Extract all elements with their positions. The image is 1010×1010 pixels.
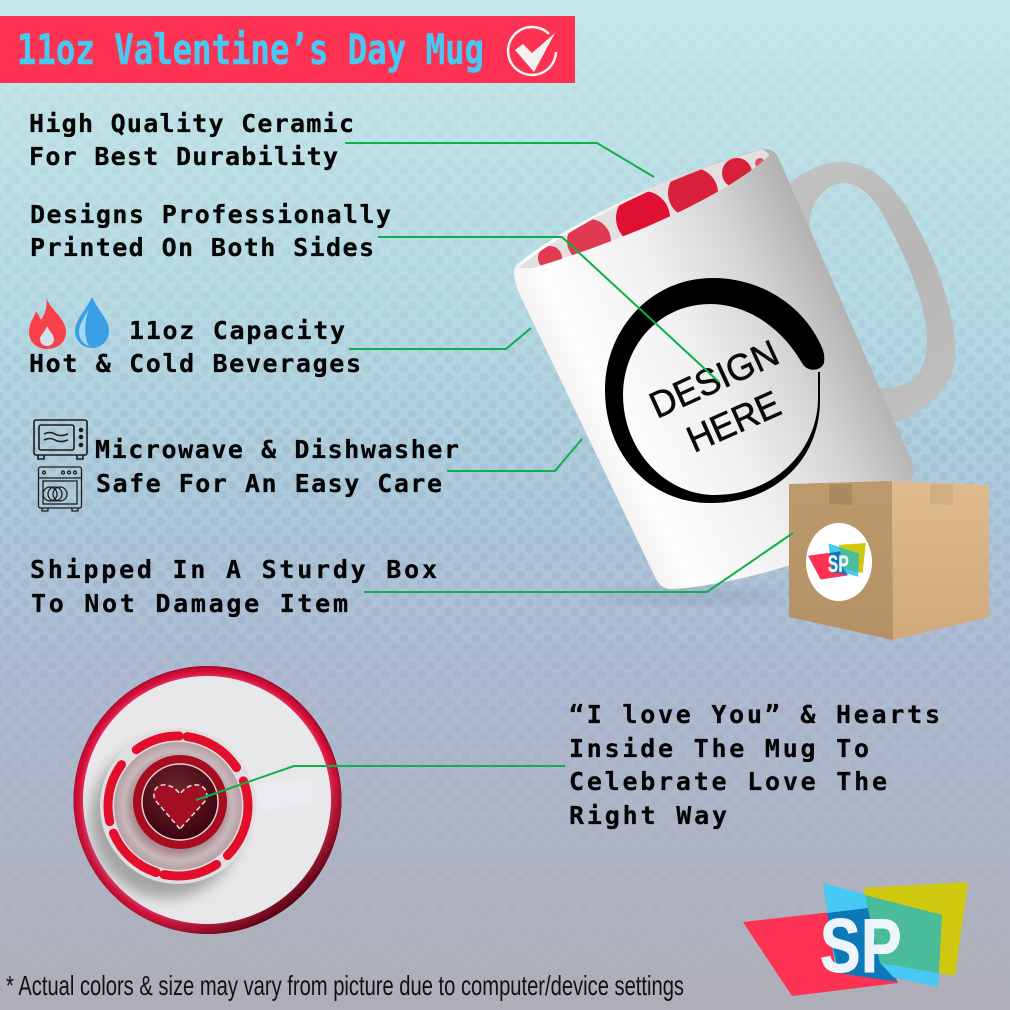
design here text: DESIGN [643,332,785,426]
box sticker [806,523,872,601]
mug interior with hearts [518,149,770,270]
feature: microwave and dishwasher safe: Microwave & Dishwasher [95,435,459,464]
mug body [514,149,914,589]
cup handle [255,780,312,811]
feature: capacity: 11oz Capacity [129,316,345,345]
feature: inside the mug: Celebrate Love The [569,767,887,796]
feature: high quality ceramic: For Best Durability [29,142,338,171]
cup heart border [108,736,248,876]
connector lines [196,143,793,800]
heart [154,785,207,829]
icon: dishwasher [38,467,82,511]
feature: sturdy box [30,555,437,618]
icon: microwave [34,420,87,459]
dark red base [133,755,227,849]
feature: inside the mug: “I love You” & Hearts [569,700,940,729]
cup shadow [90,742,242,898]
title banner [0,16,575,83]
icon: check mark [508,27,556,75]
feature: high quality ceramic [29,109,354,171]
feature: inside the mug [569,700,940,830]
feature: printed on both sides: Designs Professionally [30,200,391,229]
icon: flame [29,297,66,349]
box right face [892,481,989,640]
sticker logo: S [828,550,838,578]
box left face [789,481,893,640]
mug with design placeholder [514,149,955,589]
title: 11oz Valentine’s Day Mug [17,25,484,74]
feature: capacity: Hot & Cold Beverages [29,349,361,378]
feature: microwave and dishwasher safe [95,435,459,498]
feature: inside the mug: Right Way [569,801,727,830]
SP logo: S [820,904,861,989]
feature: capacity [29,316,361,378]
brush circle [605,278,824,503]
SP logo [743,882,968,996]
feature: microwave and dishwasher safe: Safe For An Easy Care [96,469,442,498]
feature: high quality ceramic: High Quality Ceramic [29,109,354,138]
icon: water drop [75,297,109,348]
sticker logo [808,543,866,579]
top view plate with mug [74,666,342,934]
plate ring [74,666,342,934]
disclaimer: * Actual colors & size may vary from picture due to computer/device settings [6,970,684,1001]
plate [83,676,331,924]
mug handle [788,162,955,424]
feature: sturdy box: Shipped In A Sturdy Box [30,555,437,584]
feature: printed on both sides: Printed On Both Sides [30,233,374,262]
feature: printed on both sides [30,200,391,262]
mug shadow [595,591,785,603]
sticker logo: P [838,550,849,578]
SP logo: P [861,904,902,989]
feature: inside the mug: Inside The Mug To [569,734,869,763]
cup [100,728,256,884]
design here text: HERE [681,383,787,460]
shipping box [789,481,989,640]
feature: sturdy box: To Not Damage Item [31,589,348,618]
